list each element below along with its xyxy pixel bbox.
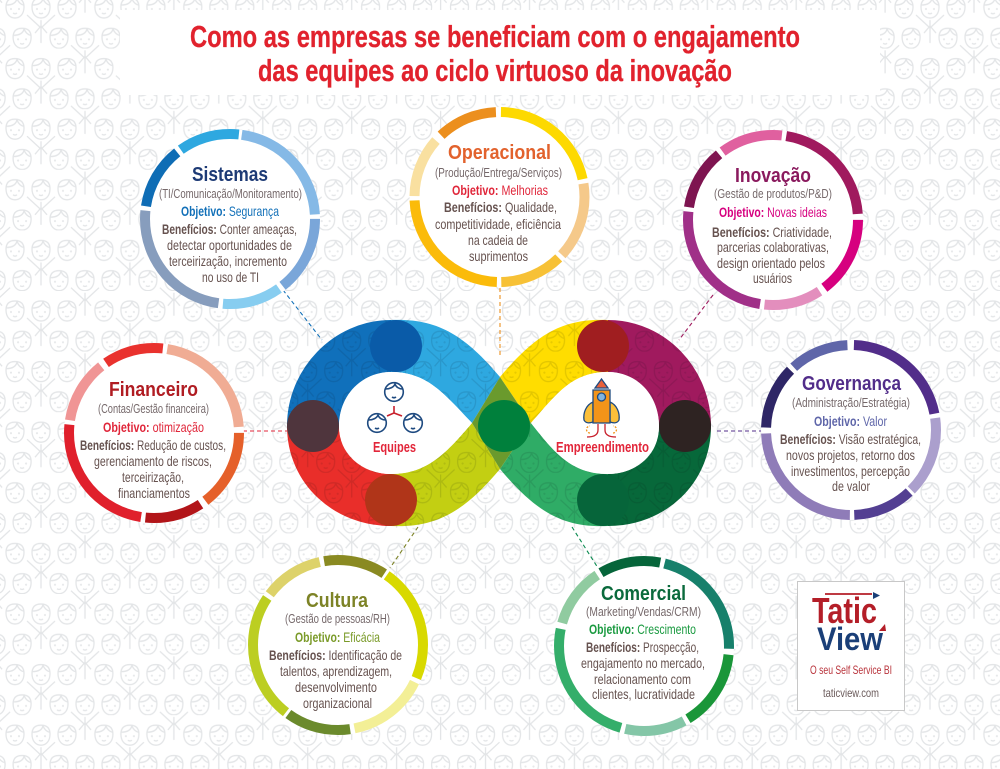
text: Governança: Objetivo: Valor [814,413,887,429]
text: Operacional [435,142,562,264]
ring: Sistemas [145,134,315,304]
panel: Operacional [410,107,590,287]
text: Operacional: Objetivo: Melhorias [452,182,548,198]
text: Cultura: Objetivo: Eficácia [295,629,380,645]
text: Inovação: Inovação [735,165,811,187]
text: Governança: de valor [832,478,870,494]
text: Comercial: clientes, lucratividade [592,686,695,702]
logo wordmark [812,590,886,657]
text: Cultura: desenvolvimento [295,679,377,695]
text: Governança: (Administração/Estratégia) [792,395,910,410]
tagline: O seu Self Service BI [810,663,892,677]
text: Comercial: relacionamento com [594,671,691,687]
text: Governança: investimentos, percepção [791,463,910,479]
text: Comercial: Benefícios: Prospecção, [586,639,699,655]
title: Como as empresas se beneficiam com o engajamento [190,19,800,54]
text: Comercial [581,583,705,702]
text: Cultura: talentos, aprendizagem, [280,663,392,679]
icon: team of three people [368,383,422,432]
panel: Sistemas [140,129,320,309]
text: Sistemas: Sistemas [192,164,268,186]
text: Financeiro: gerenciamento de riscos, [94,453,212,469]
text: Sistemas: no uso de TI [202,269,259,285]
panel: Inovação [683,130,863,310]
text: Sistemas: detectar oportunidades de [167,237,292,253]
text: Comercial: Comercial [601,583,686,605]
text: Sistemas: Benefícios: Conter ameaças, [162,221,297,237]
text: Governança: Governança [802,373,902,395]
text: Financeiro: terceirização, [122,469,184,485]
website: taticview.com [823,686,879,700]
title [120,10,880,95]
ring: Governança [766,345,936,515]
panel: Governança [761,340,941,520]
title: das equipes ao ciclo virtuoso da inovação [258,53,732,88]
text: Sistemas: Objetivo: Segurança [181,203,279,219]
text: Cultura: (Gestão de pessoas/RH) [285,611,390,626]
text: Operacional: suprimentos [469,248,528,264]
panel: Cultura [248,555,428,735]
text: Financeiro: Benefícios: Redução de custos, [80,437,226,453]
ring: Operacional [414,112,584,282]
text: Inovação: usuários [753,270,792,286]
text: Operacional: (Produção/Entrega/Serviços) [435,165,562,180]
text: Operacional: competitividade, eficiência [435,216,561,232]
dashed connectors [243,288,762,568]
text: Financeiro: financiamentos [118,485,190,501]
text: Inovação [712,165,832,286]
text: Inovação: Benefícios: Criatividade, [712,224,832,240]
text: Operacional: na cadeia de [468,232,528,248]
icon: rocket [584,379,619,437]
text: Cultura [269,590,402,711]
text: Inovação: (Gestão de produtos/P&D) [714,186,832,201]
logo card: TaticView [798,582,904,710]
text: Sistemas: (TI/Comunicação/Monitoramento) [159,186,302,201]
text: Inovação: parcerias colaborativas, [717,239,829,255]
text: Sistemas: terceirização, incremento [169,253,287,269]
text: Cultura: Benefícios: Identificação de [269,647,402,663]
white hole: Equipes [339,372,472,474]
text: Financeiro: (Contas/Gestão financeira) [98,401,209,416]
crossing overlap [472,377,531,469]
text: Comercial: Objetivo: Crescimento [589,621,696,637]
text: Governança: Benefícios: Visão estratégica, [780,431,921,447]
text: Cultura: Cultura [306,590,369,612]
white hole: Empreendimento [531,372,659,474]
text: Operacional: Benefícios: Qualidade, [444,199,557,215]
loop bands [313,320,685,526]
ring: Financeiro [69,348,239,518]
logo wordmark: Tatic [812,590,877,631]
text: Comercial: (Marketing/Vendas/CRM) [586,604,701,619]
text: Governança [780,373,921,494]
text: Inovação: Objetivo: Novas ideias [719,204,827,220]
text: Financeiro [80,379,226,501]
ring: Comercial [559,561,729,731]
text: Financeiro: Objetivo: otimização [103,419,204,435]
loop junction circles [287,320,711,526]
text: Comercial: engajamento no mercado, [581,655,705,671]
ring: Cultura [253,560,423,730]
panel: Comercial [554,556,734,736]
text: Financeiro: Financeiro [109,379,198,401]
text: Cultura: organizacional [303,695,372,711]
text: Sistemas [159,164,302,285]
label: Equipes: Equipes [373,439,416,456]
logo wordmark: View [817,621,883,657]
panel: Financeiro [64,343,244,523]
infinity loop [287,320,711,526]
ring: Inovação [688,135,858,305]
text: Operacional: Operacional [448,142,551,164]
label: Empreendimento: Empreendimento [556,439,649,456]
text: Inovação: design orientado pelos [717,255,825,271]
text: Governança: novos projetos, retorno dos [786,447,915,463]
